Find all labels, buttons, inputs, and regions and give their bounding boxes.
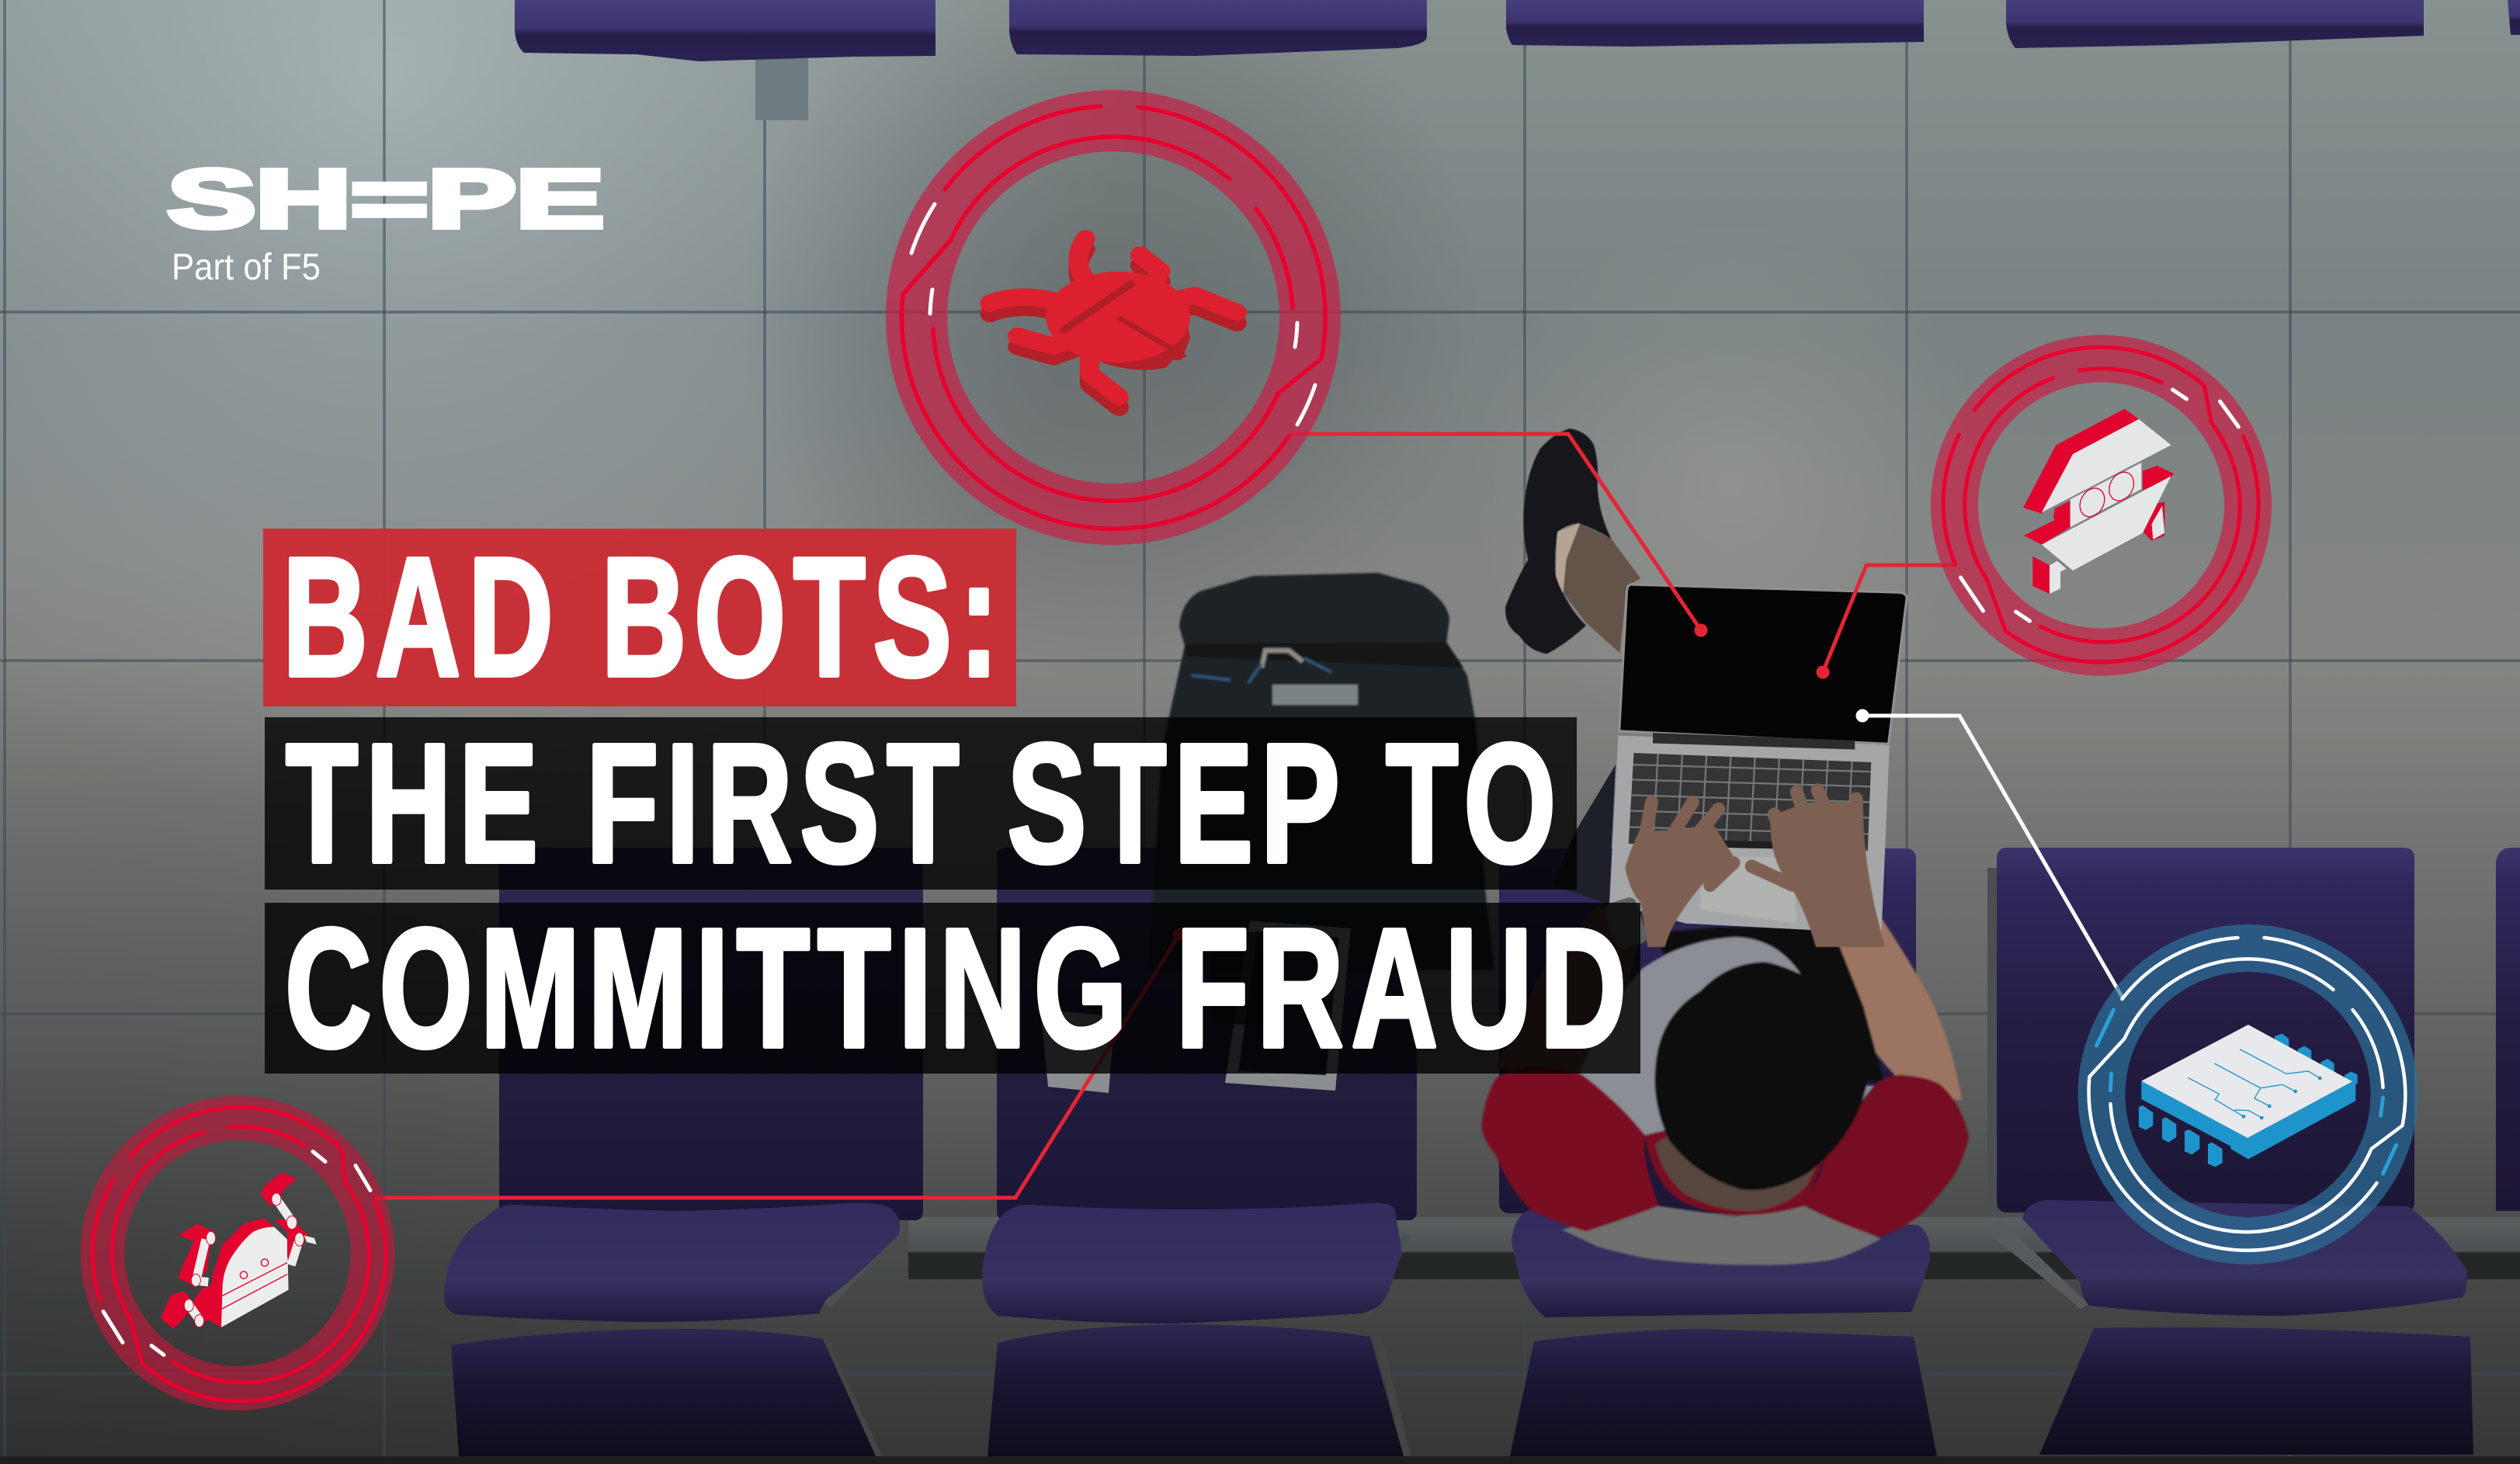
circle: bug [901, 106, 1325, 529]
metal frame rail [908, 1217, 2520, 1279]
Shape logo [168, 154, 604, 288]
laptop [1609, 585, 1907, 931]
hair [1654, 962, 1868, 1190]
circle: chip [2089, 938, 2405, 1251]
man: arms, shirt, head [1482, 904, 1969, 1265]
red title bar [263, 529, 1016, 706]
connector: bug circle to laptop [1289, 434, 1708, 637]
circle: bot head [1943, 347, 2258, 662]
grey shirt [1562, 928, 1884, 1265]
hands on keyboard [1603, 790, 1885, 951]
headline line one: BAD BOTS: [283, 523, 1006, 712]
top row of seats [515, 0, 2520, 120]
headline line three: COMMITTING FRAUD [285, 894, 1634, 1083]
headline line two: THE FIRST STEP TO [286, 709, 1564, 898]
forearms [1496, 904, 1962, 1101]
bottom strip [0, 1456, 2520, 1464]
tagline: Part of F5 [172, 247, 321, 288]
backpack [1149, 573, 1494, 970]
seat two [982, 848, 1417, 1456]
circle: robot with arms [92, 1108, 386, 1401]
connector: chip circle to laptop [1855, 709, 2123, 999]
seat four [1987, 848, 2473, 1455]
connector: bot circle to laptop [1817, 565, 1956, 678]
seat one [444, 848, 923, 1456]
seat five edge [2496, 848, 2520, 1211]
seat three [1499, 848, 1937, 1456]
red sleeves [1482, 1066, 1969, 1237]
crossed leg and shoe [1505, 428, 1640, 654]
black title bar two [265, 903, 1640, 1074]
connector: robot arms circle to phone [374, 928, 1185, 1198]
icon: bot head [2023, 409, 2174, 594]
icon: chip [2139, 1025, 2358, 1167]
title block [263, 523, 1640, 1083]
tablet and phone on seat [1040, 921, 1351, 1093]
icon: robot with arms [161, 1173, 317, 1329]
Shape logo: SH=PE [168, 154, 604, 245]
black title bar one [265, 717, 1577, 890]
dark trousers [1553, 765, 1616, 904]
icon: bug [990, 239, 1237, 408]
